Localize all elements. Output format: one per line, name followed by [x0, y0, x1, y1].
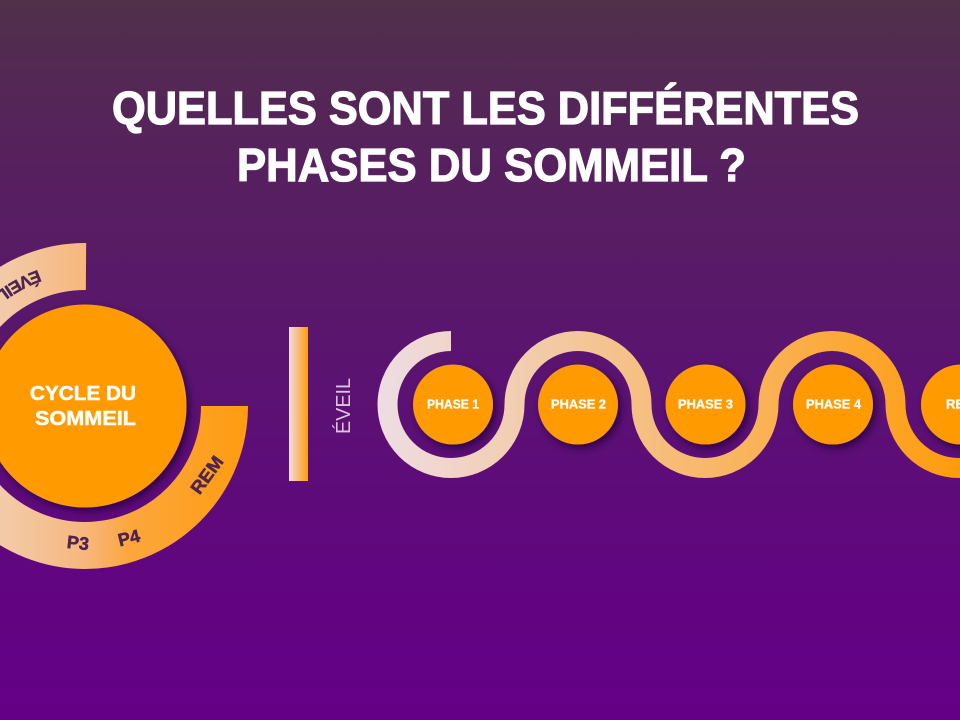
- panel: sleep phases path: [388, 341, 960, 468]
- phase 3: [666, 364, 746, 444]
- phase 2: PHASE 2: [551, 396, 606, 412]
- ring: cycle arc: [0, 266, 225, 545]
- divider bar: [289, 327, 308, 481]
- central circle label: [30, 383, 136, 430]
- title: QUELLES SONT LES DIFFÉRENTES: [112, 82, 859, 134]
- central circle: [0, 304, 186, 508]
- serpentine path: [388, 341, 960, 468]
- phase 1: PHASE 1: [427, 396, 479, 412]
- phase 1: [413, 364, 493, 444]
- phase 4: [793, 364, 873, 444]
- central circle label: SOMMEIL: [35, 408, 136, 430]
- panel: sleep cycle wheel: [0, 243, 248, 569]
- central circle label: CYCLE DU: [30, 383, 136, 405]
- ring label: REM: REM: [187, 452, 227, 498]
- vertical label: éveil: ÉVEIL: [332, 378, 355, 434]
- title: PHASES DU SOMMEIL ?: [237, 139, 746, 191]
- ring label: P4: P4: [116, 526, 142, 550]
- phase 2: [538, 364, 618, 444]
- phase 3: PHASE 3: [678, 396, 733, 412]
- phase 4: PHASE 4: [806, 396, 862, 412]
- phase REM: [921, 364, 960, 444]
- title: [112, 82, 859, 191]
- ring label: P3: P3: [66, 532, 90, 554]
